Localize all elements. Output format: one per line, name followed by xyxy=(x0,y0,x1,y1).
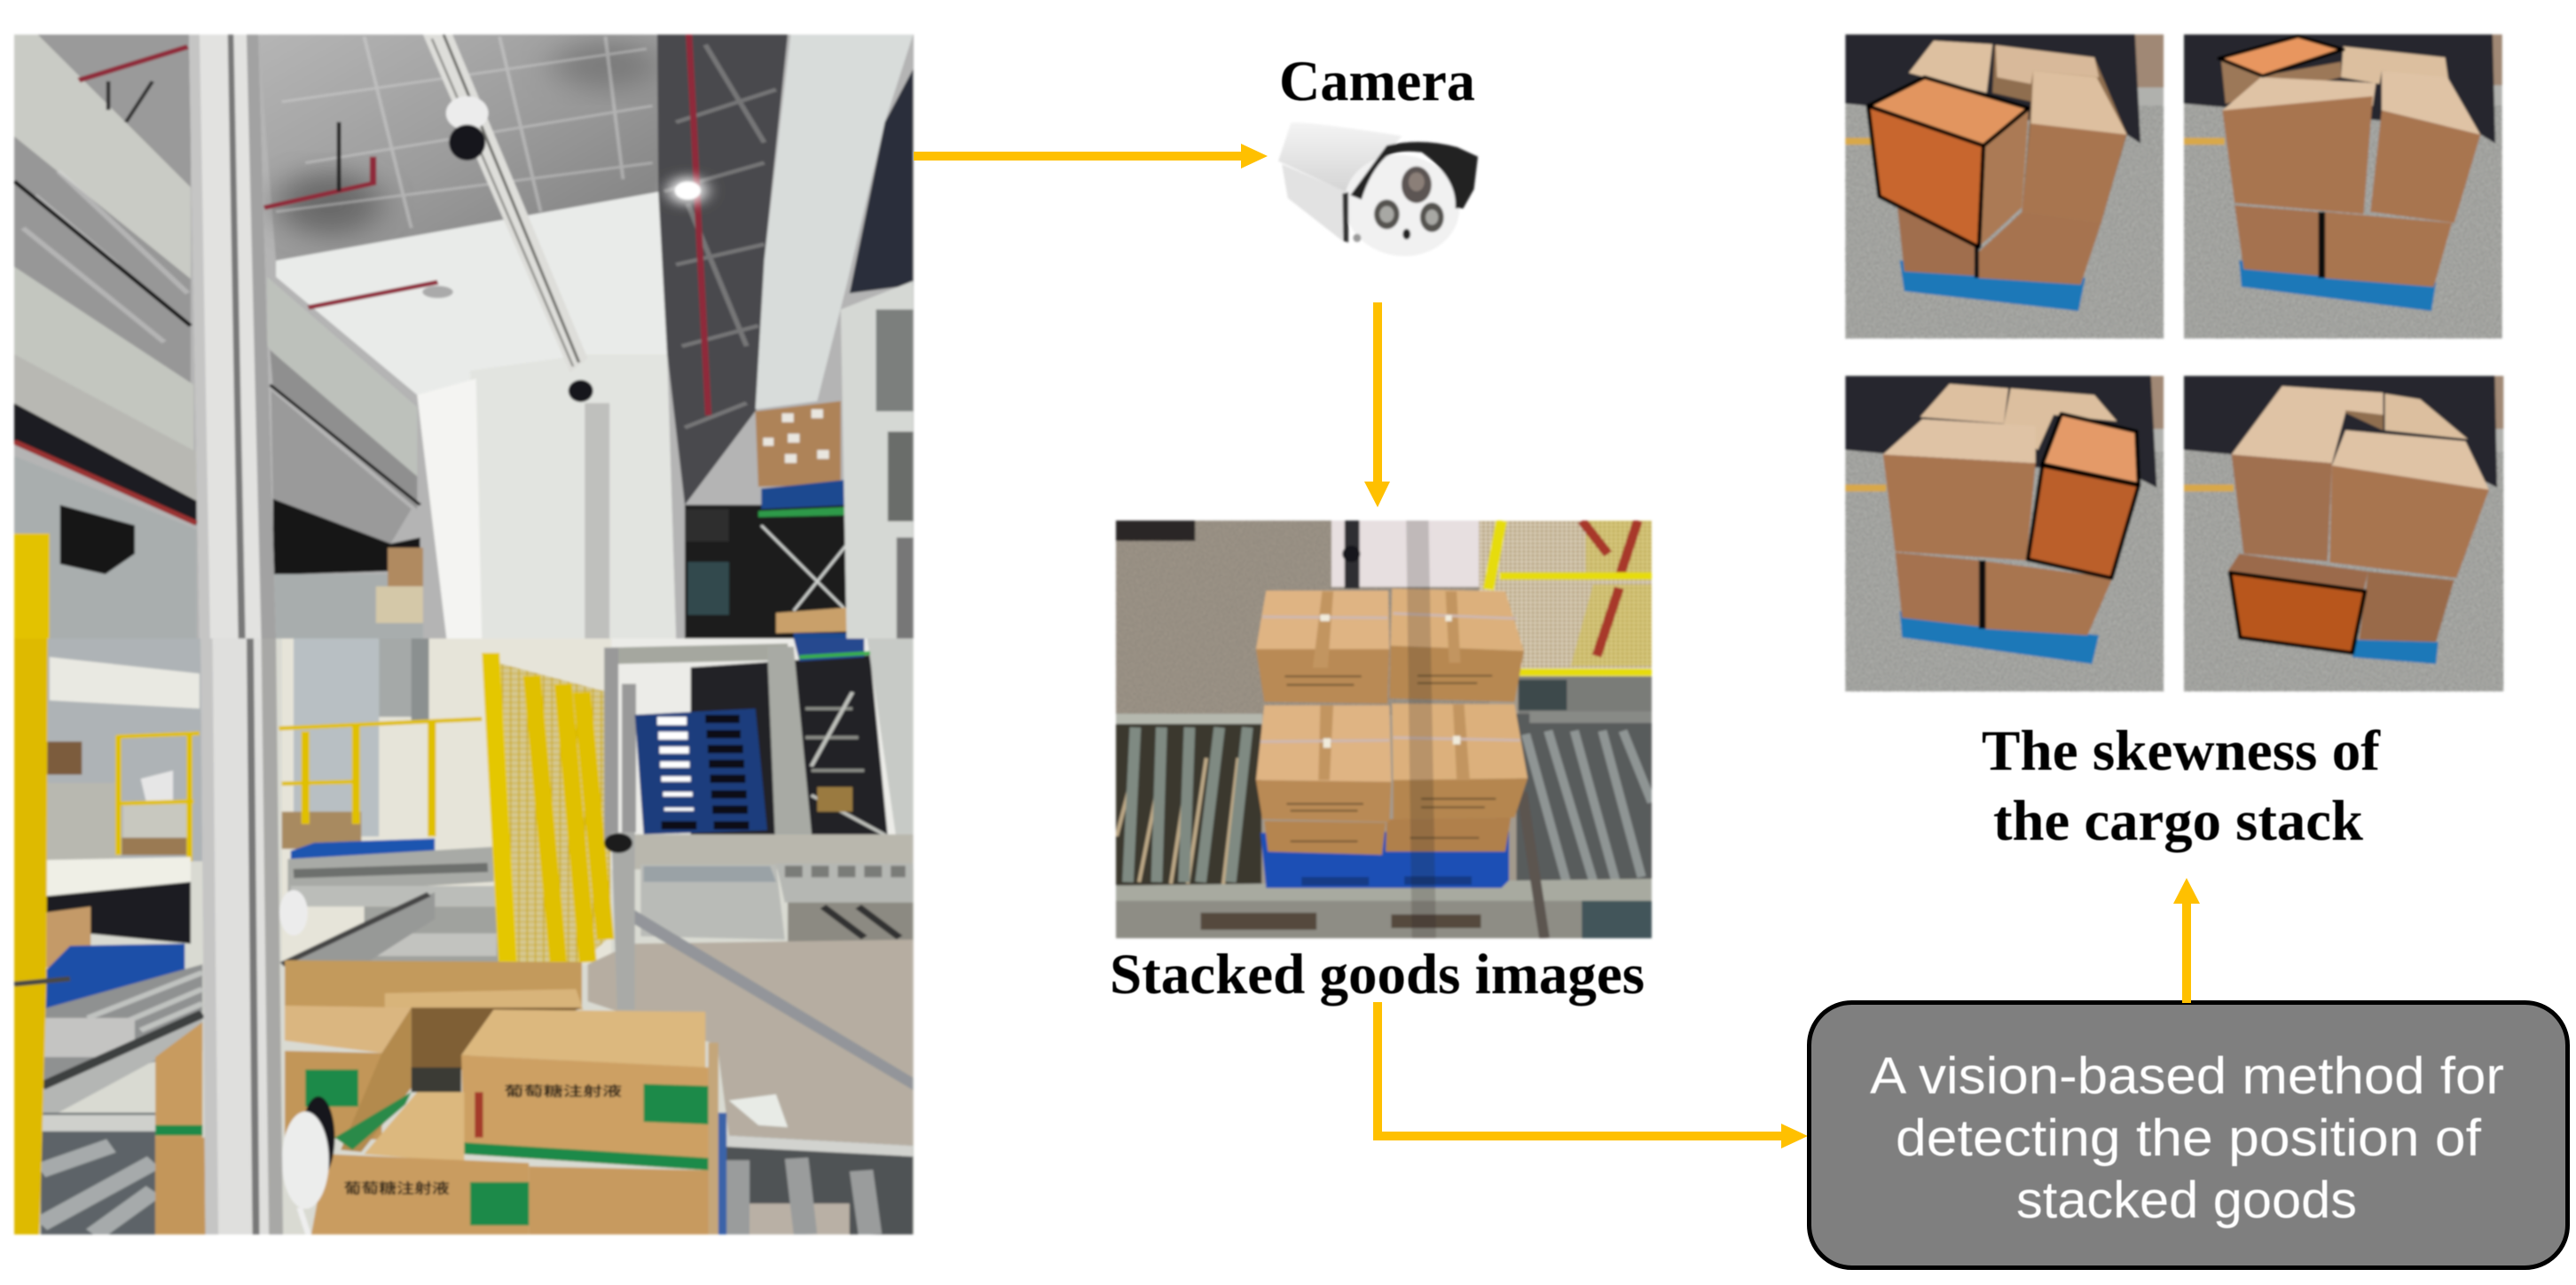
photo: warehouse with overhead cameras: 葡萄糖注射液 xyxy=(343,1180,450,1197)
photo: warehouse with overhead cameras xyxy=(14,35,914,1234)
text: method description xyxy=(1870,1047,2504,1229)
arrow: stacked goods image to method box xyxy=(1378,1002,1808,1148)
arrow: camera to stacked goods image xyxy=(1364,302,1390,507)
label: Stacked goods images: Stacked goods images xyxy=(1110,943,1645,1007)
photo: skewed lower box xyxy=(2184,376,2503,692)
panel: method box xyxy=(1810,1002,2567,1268)
icon: bullet camera xyxy=(1278,122,1478,262)
photo group: skewness examples xyxy=(1845,35,2503,692)
text: method description: detecting the position of xyxy=(1896,1109,2482,1167)
photo: skewed upper-left box xyxy=(1845,35,2164,339)
label: The skewness of the cargo stack xyxy=(1982,719,2381,853)
photo: warehouse with overhead cameras: 葡萄糖注射液 xyxy=(504,1083,622,1099)
arrow: warehouse to camera xyxy=(914,144,1268,168)
photo: stacked goods on conveyor xyxy=(1116,521,1652,938)
text: method description: stacked goods xyxy=(2016,1171,2357,1229)
photo: skewed right box xyxy=(1845,376,2164,692)
arrow: method box to skewness result xyxy=(2173,878,2200,1003)
label: Camera: Camera xyxy=(1279,50,1475,114)
label: The skewness of the cargo stack: The skewness of xyxy=(1982,719,2381,783)
text: method description: A vision-based method for xyxy=(1870,1047,2504,1105)
photo: skewed rear box xyxy=(2184,35,2502,339)
label: The skewness of the cargo stack: the cargo stack xyxy=(1993,789,2364,853)
